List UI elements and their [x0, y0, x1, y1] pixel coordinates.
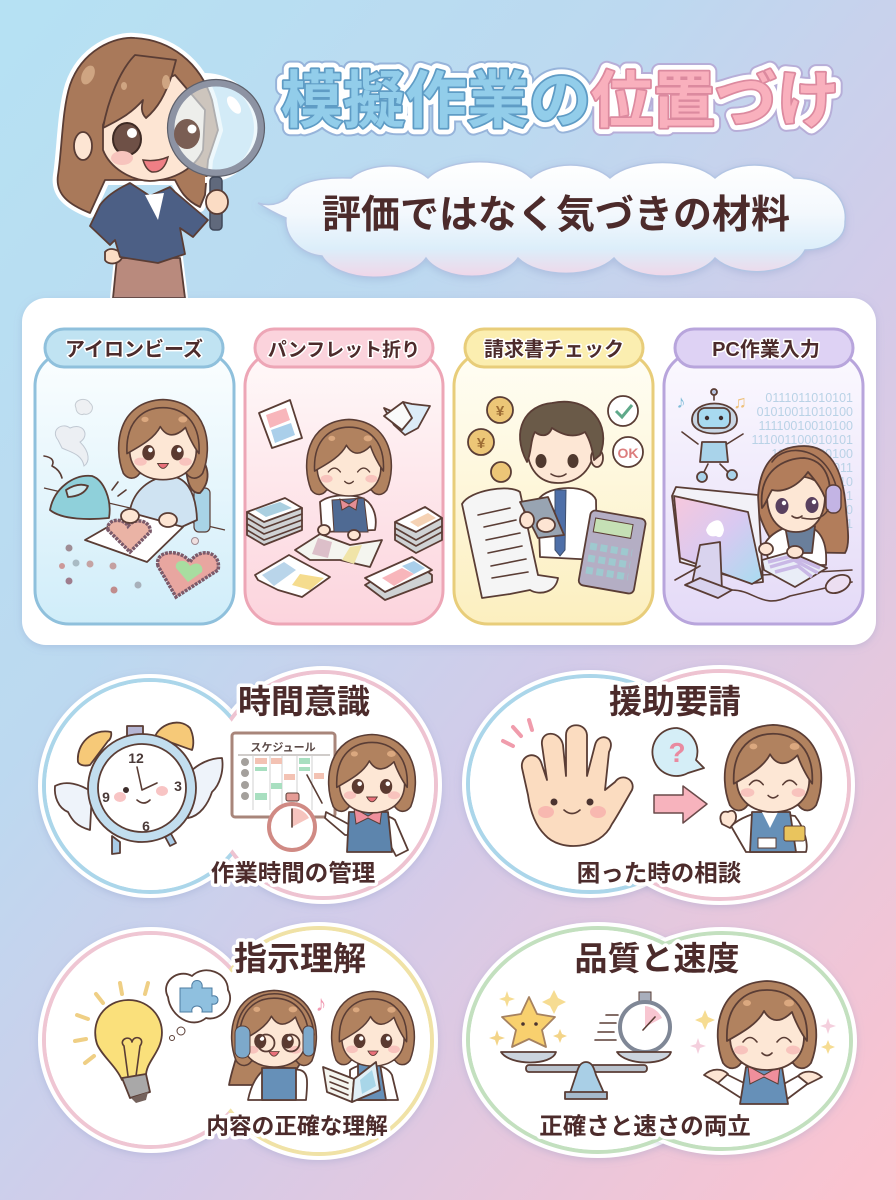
tab	[465, 329, 643, 367]
speech bubble	[258, 162, 845, 277]
icon: thought bubble with puzzle	[166, 970, 230, 1040]
title: 模擬作業の位置づけ	[281, 67, 839, 136]
panel: 品質と速度	[462, 922, 857, 1158]
heading: 指示理解	[234, 940, 366, 977]
icon: question bubble: ?	[668, 737, 686, 768]
binary digits: 1101010100110	[764, 475, 853, 489]
card: 請求書チェック: ¥	[496, 403, 505, 420]
panel: 指示理解	[38, 922, 438, 1160]
character: cheerful woman	[690, 981, 836, 1104]
icon: winged alarm clock: 9	[102, 789, 110, 805]
icon: winged alarm clock: 12	[128, 750, 144, 766]
binary digits: 0111011010101	[765, 391, 853, 405]
tab: PC作業入力	[712, 338, 820, 361]
binary digits	[752, 391, 853, 531]
tab: 請求書チェック	[484, 338, 624, 361]
icon: winged alarm clock: 3	[174, 778, 182, 794]
character: woman with headset and glasses	[229, 990, 316, 1100]
icon: light bulb	[75, 983, 162, 1103]
tab: アイロンビーズ	[65, 337, 203, 361]
card: PC作業入力: ♫	[733, 392, 747, 412]
icon: balance scale with star and stopwatch	[489, 990, 671, 1099]
panel: 援助要請	[462, 665, 855, 905]
icon: music note: ♪	[316, 991, 326, 1016]
caption: 作業時間の管理	[211, 860, 375, 886]
icon: question bubble	[652, 728, 704, 776]
card: パンフレット折り	[245, 329, 443, 624]
tab: パンフレット折り	[268, 339, 420, 361]
icon: raised hand	[503, 720, 633, 846]
tab	[255, 329, 433, 367]
card: 請求書チェック	[454, 329, 653, 624]
binary digits: 1101001010101	[764, 489, 853, 503]
binary digits: 1	[846, 517, 853, 531]
panel: four task cards	[22, 298, 876, 645]
caption: 困った時の相談	[577, 860, 741, 886]
card: アイロンビーズ	[35, 329, 234, 624]
title: 模擬作業の位置づけ	[281, 67, 839, 136]
icon: winged alarm clock	[55, 723, 223, 854]
binary digits: 110110100100	[771, 447, 853, 461]
icon: schedule board and stopwatch: スケジュール	[250, 741, 316, 754]
character: woman with magnifying glass	[58, 38, 265, 298]
binary digits: 01010011010100	[757, 405, 853, 419]
binary digits: 110110010011	[772, 461, 853, 475]
arrow	[654, 786, 707, 823]
card: 請求書チェック: OK	[618, 445, 638, 461]
title: 模擬作業の位置づけ	[281, 67, 839, 136]
binary digits: 11110010010100	[758, 419, 853, 433]
character: smiling woman	[720, 725, 821, 852]
icon: schedule board and stopwatch	[232, 733, 335, 850]
card: PC作業入力	[664, 329, 863, 624]
bubble text: 評価ではなく気づきの材料	[322, 194, 790, 237]
heading: 時間意識	[238, 683, 370, 720]
card: 請求書チェック: ¥	[477, 435, 486, 452]
caption: 正確さと速さの両立	[539, 1113, 751, 1139]
character: woman with pointer	[307, 735, 415, 856]
icon: winged alarm clock: 6	[142, 818, 150, 834]
binary digits: 10	[839, 503, 853, 517]
tab	[45, 329, 223, 367]
heading: 援助要請	[609, 683, 741, 720]
panel: 時間意識	[38, 666, 442, 904]
character: woman reading manual	[323, 991, 414, 1102]
binary digits: 111001100010101	[752, 433, 853, 447]
card: PC作業入力: ♪	[676, 392, 686, 412]
tab	[675, 329, 853, 367]
caption: 内容の正確な理解	[206, 1113, 388, 1139]
heading: 品質と速度	[574, 940, 740, 977]
